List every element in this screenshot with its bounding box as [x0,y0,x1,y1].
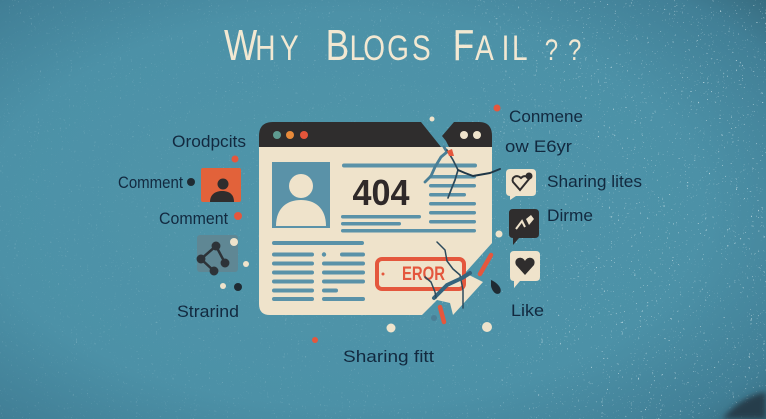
text lines upper [341,164,477,232]
decorative particles [187,104,502,343]
labels: Sharing fitt [343,347,434,366]
window control dots [273,131,481,139]
title bar right fragment [442,122,492,147]
red shards [440,255,491,322]
labels: Sharing lites [547,172,642,191]
title: HY [255,28,299,68]
browser window illustration [259,122,500,322]
icon: profile tile [201,168,241,202]
icon: dark pencil speech bubble [509,209,539,245]
window body [259,147,492,315]
upper crack [425,147,500,198]
error badge [377,259,464,289]
avatar placeholder [272,162,330,228]
labels: ow E6yr [505,137,572,156]
icon: heart speech bubble [506,169,536,200]
labels: Strarind [177,302,239,321]
window title bar [259,122,441,147]
title: LOGS [350,28,431,68]
icon: like speech bubble [510,251,540,288]
404 text: 404 [352,172,410,213]
labels: Orodpcits [172,132,246,151]
icon: share tile [197,235,238,274]
lower crack [425,242,470,308]
title [224,21,581,70]
title: ?? [545,32,581,67]
labels: Conmene [509,107,583,126]
text lines lower [272,241,365,301]
labels: Comment [159,209,228,228]
title: W [224,21,258,70]
labels: Comment [118,173,183,192]
title: B [326,21,349,70]
error badge: EROR [402,264,445,285]
labels [118,107,642,366]
labels: Like [511,301,544,320]
title: F [453,21,474,70]
labels: Dirme [547,206,593,225]
title: AIL [475,28,528,68]
